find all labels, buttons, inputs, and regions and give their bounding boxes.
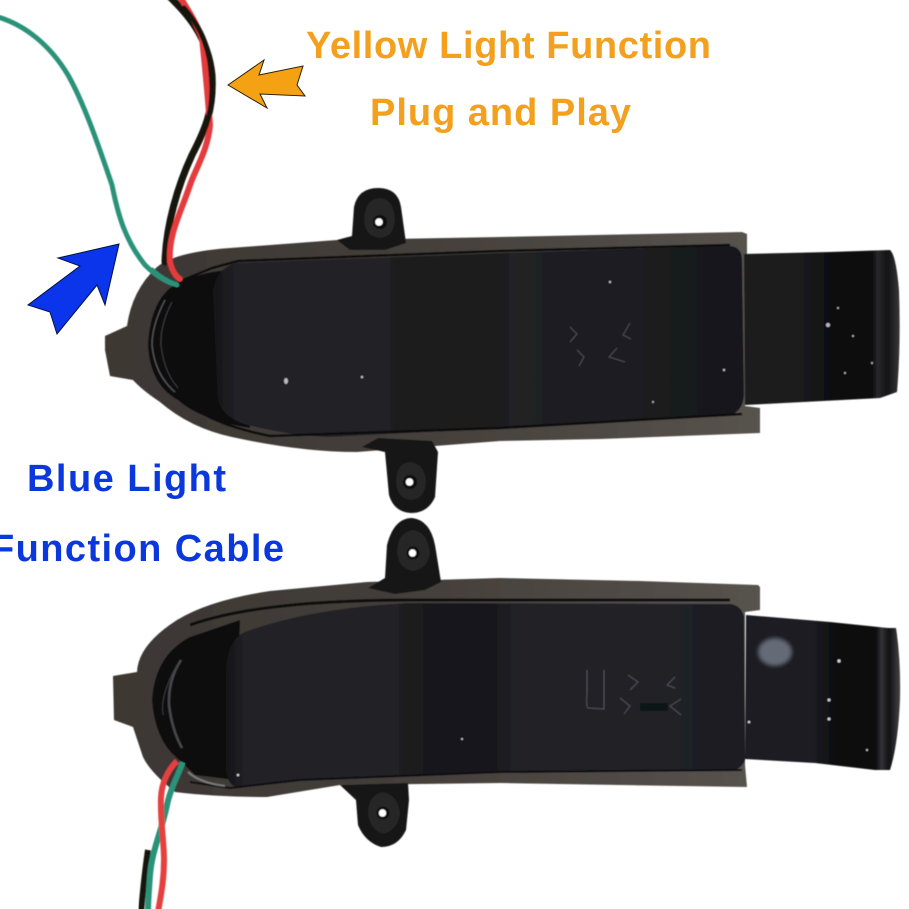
heading: blue light: Blue Light [27, 458, 226, 500]
upper bottom mounting lug [362, 438, 438, 513]
upper bezel [105, 232, 760, 452]
icon: blue arrow pointing to blue function wire [28, 244, 119, 334]
lower main panel [226, 603, 745, 788]
lower bezel [113, 578, 760, 797]
black wire [141, 850, 148, 909]
lower embossed marks [587, 670, 681, 715]
upper tongue [744, 250, 900, 405]
lower bottom mounting lug [340, 783, 409, 847]
upper mirror indicator unit [105, 188, 900, 513]
upper wires [0, 0, 212, 285]
upper lens recess [148, 270, 250, 428]
green wire [148, 762, 183, 909]
lower lens recess [152, 620, 240, 780]
black wire [165, 0, 212, 262]
red wire [158, 761, 177, 909]
lower top mounting lug [368, 518, 441, 594]
upper embossed marks [570, 323, 631, 366]
upper top mounting lug [337, 188, 406, 250]
red wire [170, 0, 210, 279]
lower panel edge [190, 600, 730, 625]
green wire [0, 17, 177, 285]
heading: yellow light function: Yellow Light Function [306, 25, 711, 67]
heading: plug and play: Plug and Play [370, 92, 631, 134]
lower specks [237, 659, 868, 776]
icon: orange arrow pointing to yellow function wires [228, 60, 305, 108]
green wire end [152, 270, 177, 285]
lower wires [141, 761, 183, 909]
upper panel edge highlight [178, 245, 730, 282]
upper main panel [213, 246, 744, 437]
lower mirror indicator unit [113, 518, 900, 847]
upper specks [284, 281, 873, 403]
lower smudge [758, 638, 792, 666]
lower tongue [745, 615, 900, 770]
